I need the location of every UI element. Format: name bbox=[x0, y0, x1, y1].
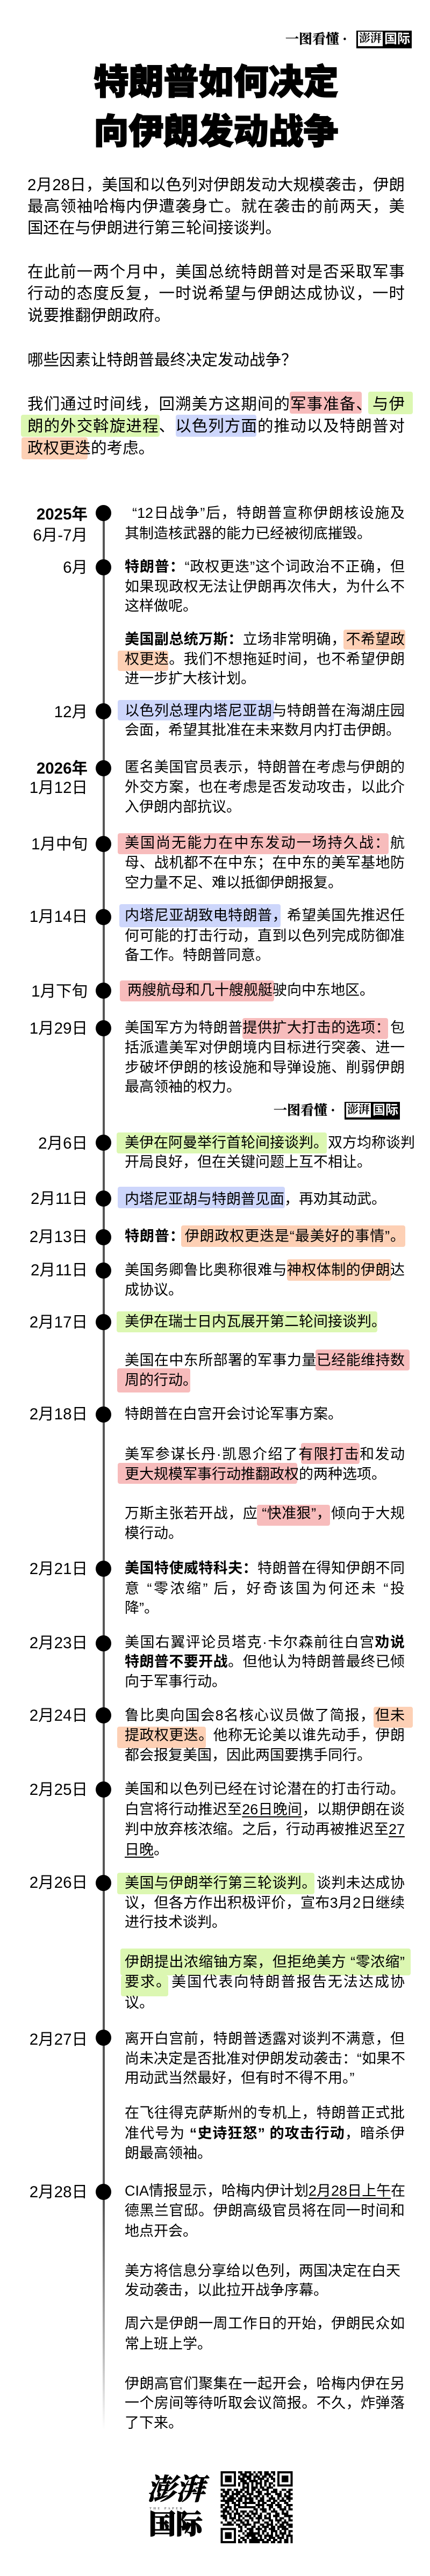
timeline node: June: 6月 bbox=[63, 559, 88, 576]
highlight: first round bbox=[117, 1132, 327, 1153]
event text: carriers: 两艘航母和几十艘舰艇驶向中东地区。 bbox=[127, 982, 374, 998]
highlight: no capacity bbox=[118, 833, 389, 854]
timeline node: Jan 29: 1月29日 bbox=[30, 1020, 88, 1037]
event text: Epic Fury approved: 准代号为 “史诗狂怒” 的攻击行动，暗杀伊 bbox=[125, 2125, 405, 2141]
highlight: second round bbox=[117, 1311, 377, 1332]
event text: bombs fell bbox=[125, 2374, 405, 2433]
event text: Rubio: 美国务卿鲁比奥称很难与神权体制的伊朗达 bbox=[125, 1262, 405, 1278]
timeline node: mid January: 1月中旬 bbox=[31, 835, 88, 853]
event text: intel shared with Israel bbox=[125, 2261, 405, 2300]
event text: 12-day war: 其制造核武器的能力已经被彻底摧毁。 bbox=[125, 525, 371, 542]
timeline node: Feb 11 Rubio: 2月11日 bbox=[31, 1261, 88, 1279]
highlight: larger action bbox=[118, 1463, 297, 1484]
event text: anonymous officials: 匿名美国官员表示，特朗普在考虑与伊朗的 bbox=[125, 759, 405, 775]
event text: third round: 美国与伊朗举行第三轮谈判。谈判未达成协 bbox=[125, 1875, 405, 1891]
event text: Witkoff: 美国特使威特科夫：特朗普在得知伊朗不同 bbox=[125, 1560, 405, 1576]
highlight: no regime change 2 bbox=[118, 651, 168, 671]
event text: Trump on regime change bbox=[125, 559, 405, 614]
event text: Netanyahu at Mar-a-Lago: 会面，希望其批准在未来数月内打击伊朗。 bbox=[125, 722, 400, 738]
event text: CIA intelligence: CIA情报显示，哈梅内伊计划2月28日上午在 bbox=[125, 2183, 405, 2199]
timeline node: Feb 24: 2月24日 bbox=[30, 1707, 88, 1724]
event text: bombs fell: 了下来。 bbox=[125, 2415, 183, 2431]
event text: Netanyahu call: 何可能的打击行动，直到以色列完成防御准 bbox=[125, 928, 405, 944]
timeline node: 2025 June-July: 2025年 bbox=[37, 506, 88, 523]
timeline node: Feb 13: 2月13日 bbox=[30, 1228, 88, 1246]
event text: Tucker Carlson: 向于军事行动。 bbox=[125, 1673, 226, 1690]
event text: intel shared with Israel: 发动袭击，以此拉开战争序幕。 bbox=[125, 2282, 328, 2298]
timeline node: Feb 28 bbox=[27, 2182, 111, 2202]
highlight: diplomacy line 1 bbox=[368, 392, 413, 414]
event text: third round: 进行技术谈判。 bbox=[125, 1914, 226, 1930]
highlight: Netanyahu meeting bbox=[118, 1187, 285, 1208]
timeline node: 2025 June-July bbox=[33, 505, 111, 544]
event text: leaving White House: 尚未决定是否批准对伊朗发动袭击：“如果不 bbox=[125, 2051, 405, 2067]
highlight: no regime change mention 2 bbox=[117, 1727, 206, 1748]
timeline node: Feb 11: 2月11日 bbox=[31, 1190, 88, 1208]
timeline node: Feb 27 bbox=[27, 2028, 111, 2047]
mid-page logo bbox=[274, 1102, 400, 1120]
highlight: no regime change 1 bbox=[343, 630, 405, 650]
event text: military options bbox=[125, 1018, 405, 1095]
event text: force sustained for weeks: 周的行动。 bbox=[125, 1372, 197, 1388]
timeline node: Feb 18: 2月18日 bbox=[30, 1405, 88, 1423]
event text: Netanyahu call bbox=[119, 904, 405, 963]
event text: Epic Fury approved bbox=[125, 2103, 405, 2163]
highlight: fast accurate ruthless bbox=[257, 1505, 330, 1526]
event text: anonymous officials: 入伊朗内部抗议。 bbox=[125, 799, 241, 815]
event text: 12-day war bbox=[125, 505, 405, 542]
intro paragraph with colour key: 我们通过时间线，回溯美方这期间的军事准备、与伊 bbox=[27, 395, 405, 413]
event text: Saturday in Iran: 常上班上学。 bbox=[125, 2336, 212, 2352]
event text: strike postponed: 美国和以色列已经在讨论潜在的打击行动。 bbox=[125, 1781, 405, 1797]
highlight: Netanyahu call bbox=[119, 904, 281, 927]
highlight: sustain line 2 bbox=[117, 1368, 190, 1392]
event text: uranium proposal: 要求。美国代表向特朗普报告无法达成协 bbox=[125, 1974, 405, 1990]
event text: military options: 括派遣美军对伊朗境内目标进行突袭、进一 bbox=[125, 1040, 405, 1056]
event text: no prolonged war capacity: 空力量不足、难以抵御伊朗报复。 bbox=[125, 875, 342, 891]
footer brand logo bbox=[146, 2472, 205, 2538]
event text: Vance fast bbox=[125, 1505, 405, 1541]
footer brand logo: THE PAPER bbox=[149, 2507, 184, 2510]
event text: Rubio: 成协议。 bbox=[125, 1282, 183, 1298]
event text: force sustained for weeks: 美国在中东所部署的军事力量已经能维持数 bbox=[125, 1352, 405, 1368]
highlight: third round bbox=[117, 1873, 314, 1894]
event text: Netanyahu call: 内塔尼亚胡致电特朗普，希望美国先推迟任 bbox=[125, 907, 405, 923]
title bbox=[94, 62, 339, 151]
event text: third round: 议，但各方作出积极评价，宣布3月2日继续 bbox=[125, 1895, 405, 1911]
intro paragraph with colour key bbox=[21, 392, 413, 459]
event text: uranium proposal bbox=[125, 1952, 405, 2012]
footer brand logo: 国际 bbox=[149, 2509, 203, 2539]
event text: Trump on regime change: 如果现政权无法让伊朗再次伟大，为什么不 bbox=[125, 579, 405, 595]
highlight: diplomacy line 2 bbox=[21, 415, 160, 437]
event text: military options: 最高领袖的权力。 bbox=[125, 1079, 241, 1095]
timeline node: Feb 21: 2月21日 bbox=[30, 1560, 88, 1578]
intro question: 哪些因素让特朗普最终决定发动战争？ bbox=[27, 351, 297, 369]
timeline node: late January: 1月下旬 bbox=[31, 983, 88, 1000]
intro paragraph 2: 行动的态度反复，一时说希望与伊朗达成协议，一时 bbox=[27, 285, 405, 302]
event text: anonymous officials: 外交方案，也在考虑是否发动攻击，以此介 bbox=[125, 779, 405, 795]
timeline node: June bbox=[63, 559, 111, 576]
event text: military options: 美国军方为特朗普提供扩大打击的选项：包 bbox=[125, 1020, 405, 1036]
event text: strike postponed bbox=[125, 1779, 405, 1859]
event text: CIA intelligence bbox=[125, 2181, 405, 2241]
intro paragraph 2: 说要推翻伊朗政府。 bbox=[27, 307, 170, 324]
event text: first round talks: 美伊在阿曼举行首轮间接谈判。双方均称谈判 bbox=[125, 1135, 415, 1151]
highlight: proposal line 1 bbox=[120, 1949, 411, 1975]
intro paragraph 1: 国还在与伊朗进行第三轮间接谈判。 bbox=[27, 219, 281, 237]
highlight: limited strike bbox=[301, 1443, 360, 1464]
highlight: theocracy bbox=[287, 1259, 391, 1281]
timeline node: Jan 14: 1月14日 bbox=[30, 908, 88, 926]
timeline node: Feb 23: 2月23日 bbox=[30, 1634, 88, 1652]
event text: Tucker Carlson: 美国右翼评论员塔克·卡尔森前往白宫劝说 bbox=[125, 1634, 405, 1650]
event text: first round talks bbox=[117, 1132, 415, 1170]
event text: anonymous officials bbox=[125, 759, 405, 815]
event text: Caine options: 更大规模军事行动推翻政权的两种选项。 bbox=[125, 1466, 386, 1482]
event text: Netanyahu at Mar-a-Lago: 以色列总理内塔尼亚胡与特朗普在海湖庄园 bbox=[125, 703, 405, 719]
footer QR code bbox=[220, 2471, 293, 2543]
event text: Trump on regime change: 这样做呢。 bbox=[125, 598, 197, 614]
event text: Caine options bbox=[118, 1443, 405, 1484]
timeline node: Feb 25 bbox=[27, 1780, 111, 1799]
event text: Tucker Carlson bbox=[125, 1633, 405, 1691]
event text: Saturday in Iran bbox=[125, 2314, 405, 2354]
event text: first round talks: 开局良好，但在关键问题上互不相让。 bbox=[125, 1154, 371, 1170]
event text: no prolonged war capacity: 母、战机都不在中东；在中东的美军基地防 bbox=[125, 855, 405, 871]
event text: second round: 美伊在瑞士日内瓦展开第二轮间接谈判。 bbox=[125, 1314, 386, 1330]
event text: Witkoff: 意 “零浓缩” 后，好奇该国为何还未 “投 bbox=[125, 1581, 405, 1597]
event text: Saturday in Iran: 周六是伊朗一周工作日的开始，伊朗民众如 bbox=[125, 2315, 405, 2332]
title: 向伊朗发动战争 bbox=[94, 112, 339, 151]
event text: bombs fell: 伊朗高官们聚集在一起开会，哈梅内伊在另 bbox=[125, 2376, 405, 2392]
event text: CIA intelligence: 地点开会。 bbox=[125, 2223, 197, 2239]
intro paragraph 1 bbox=[27, 176, 405, 237]
highlight: no regime change mention 1 bbox=[374, 1707, 413, 1728]
event text: Vance: 美国副总统万斯：立场非常明确，不希望政 bbox=[125, 631, 405, 647]
mid-page logo: 一图看懂 · bbox=[274, 1103, 335, 1118]
highlight: expanded strike options bbox=[242, 1018, 388, 1039]
header logo: 一图看懂 · bbox=[285, 32, 347, 47]
event text: force sustained for weeks bbox=[117, 1350, 410, 1392]
timeline node: Feb 6: 2月6日 bbox=[38, 1135, 88, 1152]
event text: intel shared with Israel: 美方将信息分享给以色列，两国决定在白天 bbox=[125, 2263, 400, 2279]
event text: White House meeting: 特朗普在白宫开会讨论军事方案。 bbox=[125, 1406, 342, 1422]
timeline node: December: 12月 bbox=[54, 703, 88, 721]
timeline node: 2026 Jan 12: 2026年 bbox=[37, 760, 88, 777]
event text: 12-day war: “12日战争”后，特朗普宣称伊朗核设施及 bbox=[132, 505, 405, 521]
event text: Rubio briefing: 鲁比奥向国会8名核心议员做了简报，但未 bbox=[125, 1707, 405, 1723]
footer brand logo: 澎湃 bbox=[147, 2473, 205, 2506]
timeline node: 2026 Jan 12: 1月12日 bbox=[30, 779, 88, 797]
event text: military options: 步破坏伊朗的核设施和导弹设施、削弱伊朗 bbox=[125, 1059, 405, 1076]
event text: uranium proposal: 伊朗提出浓缩铀方案，但拒绝美方 “零浓缩” bbox=[125, 1954, 405, 1970]
event text: Rubio briefing: 都会报复美国，因此两国要携手同行。 bbox=[125, 1747, 371, 1763]
intro paragraph 1: 2月28日，美国和以色列对伊朗发动大规模袭击，伊朗 bbox=[27, 176, 405, 194]
event text: no prolonged war capacity bbox=[118, 833, 405, 891]
event text: Witkoff bbox=[125, 1558, 405, 1618]
event text: Witkoff: 降”。 bbox=[125, 1600, 159, 1616]
title: 特朗普如何决定 bbox=[94, 62, 339, 102]
event text: no prolonged war capacity: 美国尚无能力在中东发动一场持久战：航 bbox=[125, 835, 405, 851]
timeline node: Feb 24 bbox=[27, 1706, 111, 1725]
event text: strike postponed: 白宫将行动推迟至26日晚间，以期伊朗在谈 bbox=[125, 1801, 405, 1817]
event text: Tucker Carlson: 特朗普不要开战。但他认为特朗普最终已倾 bbox=[125, 1654, 405, 1670]
event text: Netanyahu meets Trump: 内塔尼亚胡与特朗普见面，再劝其动武。 bbox=[125, 1191, 386, 1207]
event text: leaving White House bbox=[125, 2029, 405, 2088]
event text: Rubio briefing: 提政权更迭。他称无论美以谁先动手，伊朗 bbox=[125, 1727, 405, 1743]
timeline node: Feb 6 bbox=[38, 1135, 111, 1152]
timeline node: Feb 28: 2月28日 bbox=[30, 2183, 88, 2201]
event text: Rubio bbox=[125, 1259, 405, 1298]
event text: Vance: 权更迭。我们不想拖延时间，也不希望伊朗 bbox=[125, 651, 405, 667]
timeline node: 2025 June-July: 6月-7月 bbox=[33, 526, 88, 544]
event text: Vance: 进一步扩大核计划。 bbox=[125, 670, 255, 687]
event text: Trump on regime change: 特朗普：“政权更迭”这个词政治不正确，但 bbox=[125, 559, 405, 575]
timeline node: Feb 17: 2月17日 bbox=[30, 1314, 88, 1331]
timeline node: Feb 26: 2月26日 bbox=[30, 1874, 88, 1892]
event text: leaving White House: 离开白宫前，特朗普透露对谈判不满意，但 bbox=[125, 2031, 405, 2047]
highlight: best thing bbox=[181, 1225, 405, 1247]
highlight: regime change bbox=[22, 437, 88, 459]
event text: strike postponed: 判中放弃核浓缩。之后，行动再被推迟至27 bbox=[125, 1821, 405, 1837]
event text: best thing: 特朗普：伊朗政权更迭是“最美好的事情”。 bbox=[125, 1228, 405, 1244]
intro paragraph with colour key: 政权更迭的考虑。 bbox=[27, 439, 154, 457]
event text: Netanyahu at Mar-a-Lago bbox=[118, 700, 405, 738]
highlight: Israel bbox=[176, 415, 256, 437]
highlight: Netanyahu bbox=[118, 700, 274, 720]
intro paragraph 2: 在此前一两个月中，美国总统特朗普对是否采取军事 bbox=[27, 263, 405, 281]
intro paragraph 2 bbox=[27, 263, 405, 324]
timeline node: Feb 26 bbox=[27, 1873, 111, 1893]
intro paragraph with colour key: 朗的外交斡旋进程、以色列方面的推动以及特朗普对 bbox=[27, 417, 405, 435]
timeline node: December bbox=[54, 703, 111, 721]
header logo: 国际 bbox=[384, 32, 410, 46]
event text: uranium proposal: 议。 bbox=[125, 1995, 154, 2011]
event text: strike postponed: 日晚。 bbox=[125, 1842, 168, 1858]
highlight: sustain line 1 bbox=[316, 1350, 410, 1370]
mid-page logo: 国际 bbox=[372, 1103, 398, 1117]
event text: Netanyahu call: 备工作。特朗普同意。 bbox=[125, 947, 270, 963]
highlight: proposal line 2 bbox=[121, 1975, 168, 1996]
event text: Vance bbox=[118, 630, 405, 687]
event text: bombs fell: 一个房间等待听取会议简报。不久，炸弹落 bbox=[125, 2395, 405, 2411]
mid-page logo: 澎湃 bbox=[347, 1103, 370, 1116]
header logo bbox=[285, 31, 412, 48]
highlight: carriers bbox=[120, 980, 274, 1001]
timeline node: 2026 Jan 12 bbox=[30, 760, 111, 797]
event text: Epic Fury approved: 在飞往得克萨斯州的专机上，特朗普正式批 bbox=[125, 2105, 405, 2121]
timeline axis line bbox=[102, 513, 104, 2430]
event text: CIA intelligence: 德黑兰官邸。伊朗高级官员将在同一时间和 bbox=[125, 2203, 405, 2219]
header logo: 澎湃 bbox=[359, 32, 382, 45]
event text: Rubio briefing bbox=[125, 1706, 405, 1765]
event text: Vance fast: 万斯主张若开战，应 “快准狠”，倾向于大规 bbox=[125, 1505, 405, 1521]
event text: Vance fast: 模行动。 bbox=[125, 1525, 183, 1541]
timeline node: Feb 25: 2月25日 bbox=[30, 1781, 88, 1799]
event text: leaving White House: 用动武当然最好，但有时不得不用。” bbox=[125, 2070, 355, 2086]
highlight: military preparation bbox=[290, 392, 362, 414]
timeline node: Feb 23 bbox=[27, 1634, 111, 1653]
intro paragraph 1: 最高领袖哈梅内伊遭袭身亡。就在袭击的前两天，美 bbox=[27, 198, 405, 215]
event text: third round bbox=[125, 1873, 405, 1932]
timeline node: Feb 27: 2月27日 bbox=[30, 2031, 88, 2048]
event text: Caine options: 美军参谋长丹·凯恩介绍了有限打击和发动 bbox=[125, 1446, 405, 1462]
event text: Epic Fury approved: 朗最高领袖。 bbox=[125, 2145, 212, 2161]
